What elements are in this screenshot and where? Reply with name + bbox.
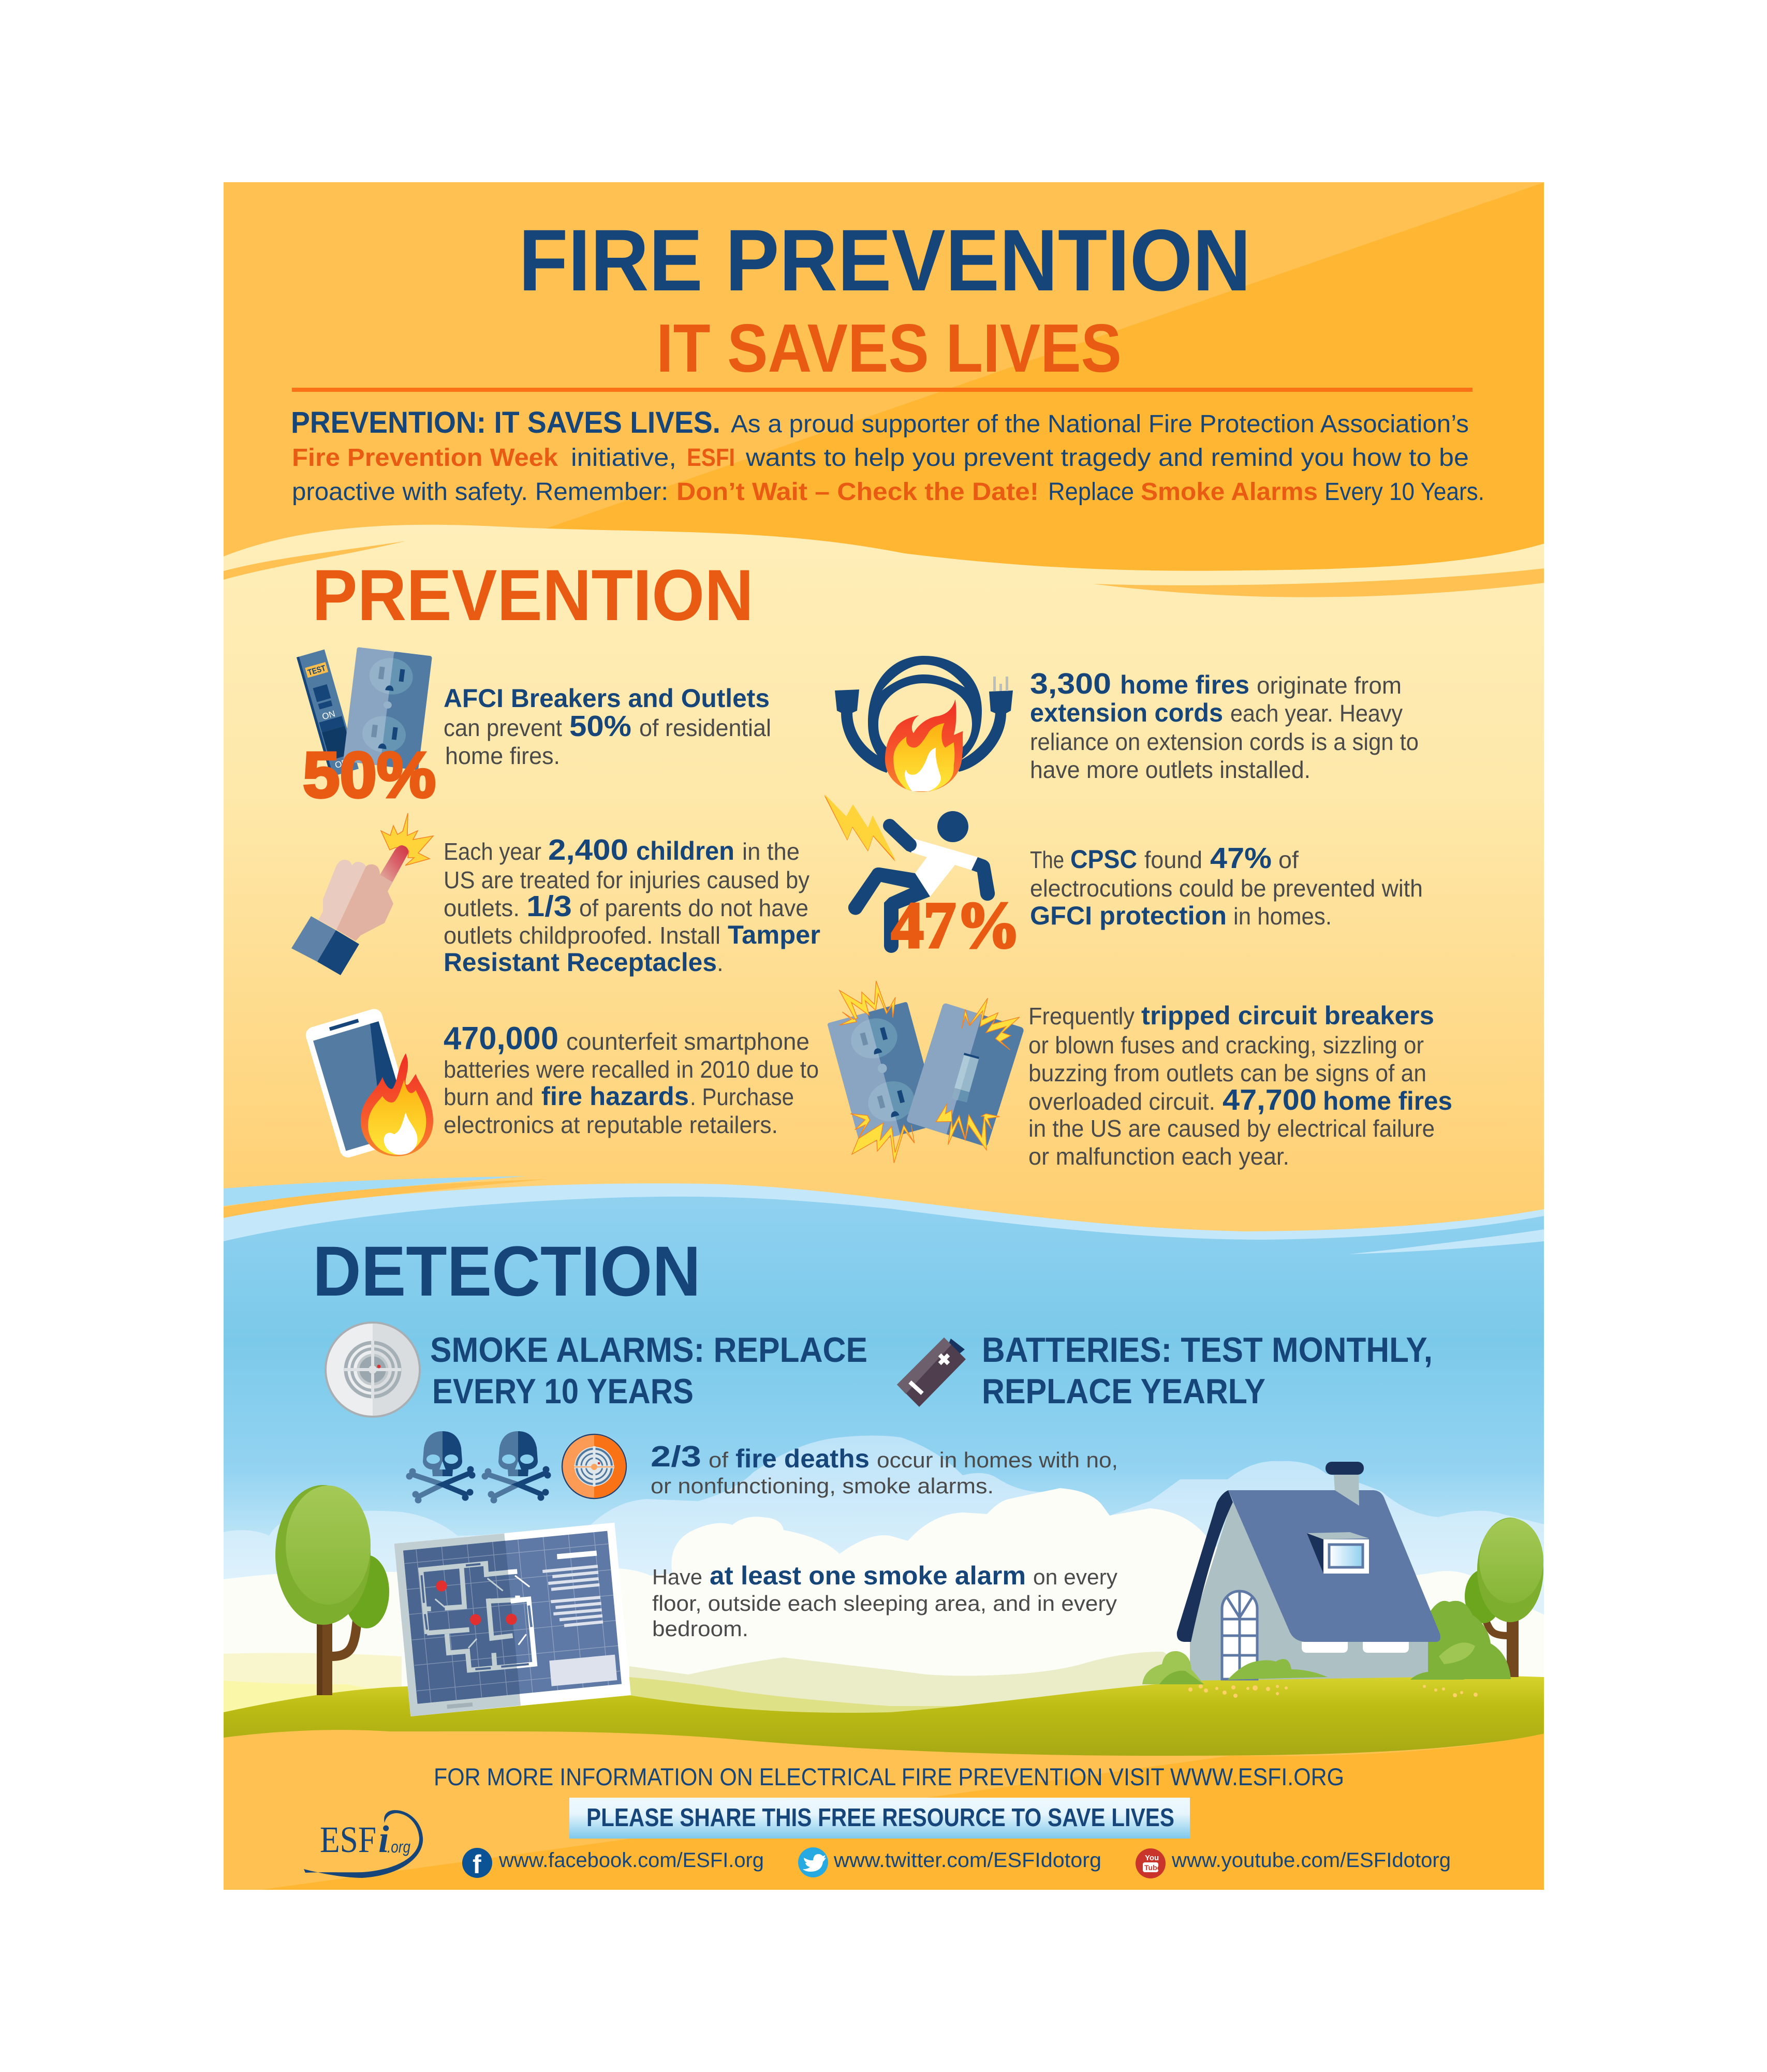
- text: tripped breakers: in the US are caused by electrical failure: [1028, 1115, 1435, 1142]
- text: children injuries: [444, 833, 820, 977]
- text: fire deaths: fire deaths: [735, 1444, 870, 1473]
- text: children injuries: of parents do not have: [579, 894, 808, 921]
- text: tripped breakers: Frequently: [1028, 1003, 1135, 1030]
- icon: left tree: [275, 1485, 389, 1695]
- text: children injuries: outlets childproofed. Install: [444, 922, 720, 949]
- icon: skull one: [406, 1431, 475, 1503]
- text: tripped breakers: 47,700: [1223, 1083, 1317, 1116]
- text: extension cords: originate from: [1257, 672, 1402, 699]
- heading: prevention: PREVENTION: [312, 554, 754, 636]
- logo: ESFi.org: ESF: [320, 1819, 376, 1860]
- text: extension cords: each year. Heavy: [1230, 700, 1403, 727]
- text: children injuries: US are treated for injuries caused by: [444, 866, 809, 893]
- icon: floor plan blueprint: [394, 1523, 631, 1716]
- icon: orange smoke alarm: [561, 1433, 627, 1500]
- text: CPSC GFCI: The: [1030, 846, 1064, 873]
- text: children injuries: outlets.: [444, 894, 520, 921]
- intro text block: Fire Prevention Week: [292, 444, 558, 472]
- intro text block: wants to help you prevent tragedy and remind you how to be: [745, 444, 1469, 472]
- icon: AFCI breaker and outlet with 50%: OFF: [334, 756, 354, 770]
- text: children injuries: children: [636, 836, 734, 865]
- icon: house: [1142, 1462, 1465, 1684]
- text: children injuries: Each year: [444, 838, 541, 865]
- icon: facebook: [462, 1848, 492, 1879]
- text: tripped breakers: or malfunction each year.: [1028, 1143, 1289, 1170]
- text: at least one smoke alarm: floor, outside each sleeping area, and in every: [652, 1591, 1117, 1615]
- icon: youtube: You: [1145, 1854, 1159, 1862]
- text: AFCI breakers: 50%: [569, 710, 631, 743]
- text: children injuries: 2,400: [548, 833, 628, 866]
- text: AFCI breakers: can prevent: [444, 714, 562, 741]
- text: tripped breakers: tripped circuit breakers: [1141, 1001, 1434, 1030]
- text: extension cords: have more outlets installed.: [1030, 756, 1310, 783]
- icon: finger touching outlet spark: [291, 813, 433, 975]
- icon: electrocuted person with 47%: 47%: [891, 889, 1021, 962]
- text: CPSC GFCI: 47%: [1210, 842, 1272, 875]
- text: at least one smoke alarm: [652, 1561, 1117, 1641]
- heading: detection: DETECTION: [313, 1232, 701, 1311]
- intro text block: Every 10 Years.: [1324, 478, 1484, 506]
- flowers on the hill: [1188, 1684, 1478, 1698]
- text: fire deaths: or nonfunctioning, smoke alarms.: [651, 1474, 994, 1498]
- text: CPSC GFCI: electrocutions could be prevented with: [1030, 875, 1423, 902]
- facebook url: www.facebook.com/ESFI.org: [498, 1849, 764, 1872]
- intro text block: Don’t Wait – Check the Date!: [676, 478, 1039, 506]
- text: at least one smoke alarm: bedroom.: [652, 1617, 748, 1641]
- back clouds: [224, 1436, 1544, 1581]
- icon: smoke alarm: [326, 1322, 420, 1417]
- hills: [224, 1652, 1201, 1713]
- youtube url: www.youtube.com/ESFIdotorg: [1171, 1849, 1451, 1872]
- text: children injuries: Resistant Receptacles: [444, 948, 717, 977]
- intro text block: Replace: [1048, 478, 1134, 506]
- intro text block: PREVENTION: IT SAVES LIVES.: [291, 406, 720, 439]
- text: children injuries: 1/3: [526, 890, 572, 923]
- logo: ESFi.org: .org: [387, 1838, 410, 1856]
- text: CPSC GFCI: GFCI protection: [1030, 901, 1227, 930]
- text: extension cords: reliance on extension cords is a sign to: [1030, 728, 1419, 755]
- intro text block: ESFI: [687, 444, 735, 472]
- text: smoke alarms heading: [430, 1330, 867, 1411]
- text: tripped breakers: [1028, 1001, 1452, 1170]
- intro text block: proactive with safety. Remember:: [292, 478, 668, 506]
- icon: AFCI breaker and outlet with 50%: TEST: [307, 664, 327, 678]
- text: extension cords: 3,300: [1030, 667, 1111, 700]
- intro text block: [291, 406, 1484, 506]
- text: extension cords: home fires: [1120, 670, 1249, 699]
- text: children injuries: .: [717, 949, 724, 976]
- text: at least one smoke alarm: Have: [652, 1565, 702, 1589]
- icon: youtube: Tube: [1144, 1863, 1161, 1872]
- twitter url: www.twitter.com/ESFIdotorg: [833, 1849, 1101, 1872]
- icon: AFCI breaker and outlet with 50%: [297, 647, 436, 811]
- intro text block: As a proud supporter of the National Fire Protection Association’s: [731, 410, 1469, 438]
- footer info line: FOR MORE INFORMATION ON ELECTRICAL FIRE PREVENTION VISIT WWW.ESFI.ORG: [434, 1763, 1344, 1790]
- panel: full poster background: [224, 182, 1544, 1536]
- text: children injuries: Tamper: [728, 920, 820, 949]
- text: smoke alarms heading: EVERY 10 YEARS: [432, 1372, 694, 1411]
- text: children injuries: in the: [742, 838, 800, 865]
- intro text block: initiative,: [571, 444, 676, 472]
- text: batteries heading: REPLACE YEARLY: [982, 1372, 1265, 1411]
- text: fire deaths: of: [709, 1448, 728, 1472]
- share banner: PLEASE SHARE THIS FREE RESOURCE TO SAVE LIVES: [586, 1804, 1174, 1832]
- text: counterfeit batteries: electronics at reputable retailers.: [444, 1111, 778, 1138]
- text: batteries heading: [982, 1330, 1433, 1411]
- text: AFCI breakers: AFCI Breakers and Outlets: [444, 684, 770, 713]
- text: tripped breakers: home fires: [1323, 1086, 1452, 1115]
- text: tripped breakers: or blown fuses and cracking, sizzling or: [1028, 1032, 1424, 1059]
- icon: facebook: f: [473, 1850, 481, 1879]
- logo: ESFi.org: i: [378, 1818, 389, 1861]
- intro text block: Smoke Alarms: [1141, 478, 1318, 506]
- text: CPSC GFCI: [1030, 842, 1423, 930]
- icon: twitter: [798, 1847, 828, 1877]
- logo: ESFi.org: [304, 1810, 423, 1878]
- text: CPSC GFCI: in homes.: [1233, 903, 1332, 930]
- text: fire deaths: occur in homes with no,: [877, 1448, 1118, 1472]
- text: tripped breakers: buzzing from outlets can be signs of an: [1028, 1060, 1426, 1086]
- text: CPSC GFCI: of: [1278, 846, 1299, 873]
- text: at least one smoke alarm: at least one smoke alarm: [710, 1561, 1026, 1590]
- text: AFCI breakers: [444, 684, 771, 769]
- front clouds: [224, 1488, 1544, 1708]
- icon: smartphone on fire: [304, 1007, 433, 1159]
- icon: AFCI breaker and outlet with 50%: ON: [321, 709, 336, 722]
- text: AFCI breakers: of residential: [639, 714, 771, 741]
- share banner: [569, 1798, 1190, 1839]
- icon: right tree and bushes: [1428, 1518, 1543, 1679]
- text: counterfeit batteries: counterfeit smartphone: [566, 1028, 809, 1055]
- icon: AFCI breaker and outlet with 50%: 50%: [303, 739, 436, 811]
- icon: skull two: [481, 1431, 551, 1503]
- text: AFCI breakers: home fires.: [445, 742, 560, 769]
- icon: battery: [897, 1338, 966, 1407]
- text: smoke alarms heading: SMOKE ALARMS: REPLACE: [430, 1330, 867, 1370]
- footer background: [224, 1730, 1544, 1891]
- text: counterfeit batteries: 470,000: [444, 1021, 558, 1056]
- text: counterfeit batteries: burn and: [444, 1083, 534, 1110]
- text: fire deaths: 2/3: [651, 1440, 701, 1473]
- text: CPSC GFCI: CPSC: [1070, 845, 1137, 874]
- ground: [224, 1674, 1544, 1760]
- text: extension cords: extension cords: [1030, 698, 1223, 727]
- subtitle: IT SAVES LIVES: [656, 310, 1122, 386]
- text: at least one smoke alarm: on every: [1033, 1565, 1117, 1589]
- heading rule: [292, 388, 1472, 392]
- text: tripped breakers: overloaded circuit.: [1028, 1088, 1215, 1115]
- icon: burning extension cord: [835, 656, 1013, 792]
- text: extension cords: [1030, 667, 1419, 783]
- text: counterfeit batteries: [444, 1021, 819, 1138]
- text: CPSC GFCI: found: [1144, 846, 1202, 873]
- text: counterfeit batteries: fire hazards: [541, 1082, 689, 1111]
- text: counterfeit batteries: . Purchase: [690, 1083, 794, 1110]
- title: FIRE PREVENTION: [519, 211, 1251, 309]
- icon: sparking outlet and switch: [827, 981, 1024, 1163]
- text: fire deaths: [651, 1440, 1118, 1498]
- text: batteries heading: BATTERIES: TEST MONTHLY,: [982, 1330, 1433, 1370]
- icon: electrocuted person with 47%: [824, 794, 1021, 962]
- icon: youtube: [1136, 1848, 1166, 1878]
- text: counterfeit batteries: batteries were recalled in 2010 due to: [444, 1056, 819, 1083]
